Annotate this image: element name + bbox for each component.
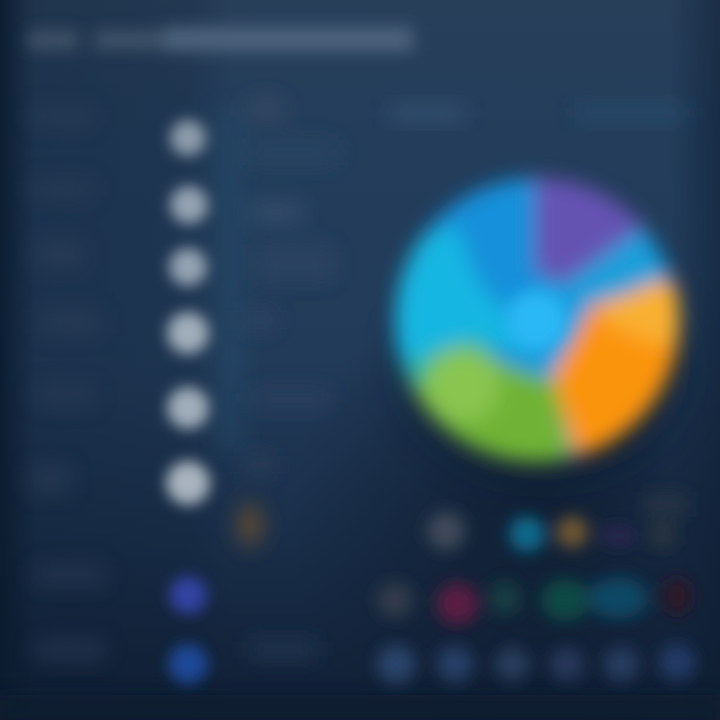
slice: light green [424,347,500,423]
slice: green [395,350,575,485]
pie centre highlight [506,290,566,350]
legend row 1 [427,492,687,552]
right headings [390,105,685,121]
white dots [166,120,210,505]
slice: orange [552,275,690,470]
slice: light blue right [661,242,669,255]
pie slices [385,170,690,485]
slice: teal edge [395,338,500,395]
slice: blue top [411,174,538,296]
legend row 2 [377,577,691,625]
column of status dots [166,120,210,684]
blue dots [168,576,208,684]
pie chart [385,170,690,485]
left column labels [30,108,105,660]
slice: purple [535,170,645,285]
slice: cyan left [384,221,516,366]
title [28,27,413,51]
pie shadow [400,250,690,480]
legend row 3 [377,644,695,683]
middle column labels [237,100,338,658]
slice: yellow highlight [600,280,690,345]
